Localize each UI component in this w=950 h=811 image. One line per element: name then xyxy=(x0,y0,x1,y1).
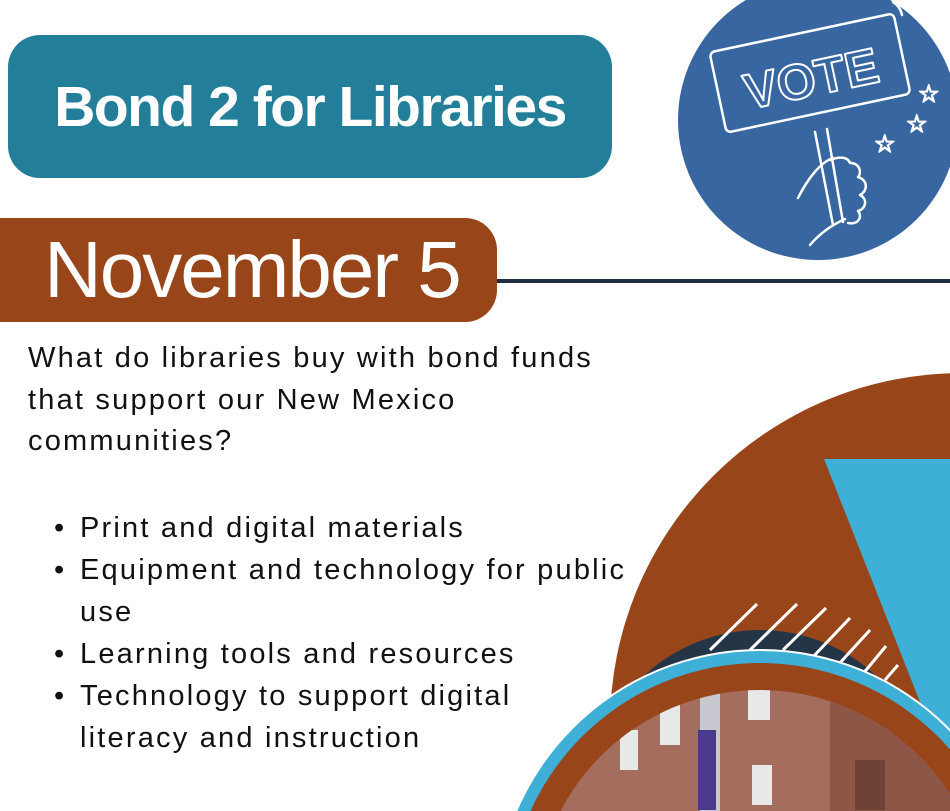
bullet list xyxy=(54,512,626,754)
white ring edge xyxy=(494,649,950,811)
bullet list: Technology to support digital literacy and instruction xyxy=(80,680,511,754)
bullet list: • xyxy=(54,554,66,586)
vote circle icon: VOTE xyxy=(739,37,884,120)
title pill: Bond 2 for Libraries xyxy=(54,74,566,138)
bullet list: • xyxy=(54,512,66,544)
vote circle icon: ☆ xyxy=(874,131,896,158)
bullet list: Print and digital materials xyxy=(80,512,465,544)
vote circle icon: ☆ xyxy=(918,81,940,108)
navy dome xyxy=(590,630,930,811)
vote circle icon: ☆ xyxy=(906,111,928,138)
vote circle icon xyxy=(678,0,950,260)
decorative art: bottom right xyxy=(517,373,950,811)
date line xyxy=(490,279,950,283)
photo xyxy=(560,690,950,811)
brown inner ring xyxy=(508,663,950,811)
cyan triangle xyxy=(824,459,950,811)
bullet list: • xyxy=(54,680,66,712)
date pill: November 5 xyxy=(44,225,460,314)
question text: What do libraries buy with bond funds that support our New Mexico communities? xyxy=(28,342,593,457)
bullet list: • xyxy=(54,638,66,670)
bullet list: Equipment and technology for public use xyxy=(80,554,626,628)
title pill xyxy=(8,35,612,178)
bullet list: Learning tools and resources xyxy=(80,638,516,670)
brown arch xyxy=(610,373,950,811)
cyan ring xyxy=(496,651,950,811)
hatch lines xyxy=(710,604,898,680)
